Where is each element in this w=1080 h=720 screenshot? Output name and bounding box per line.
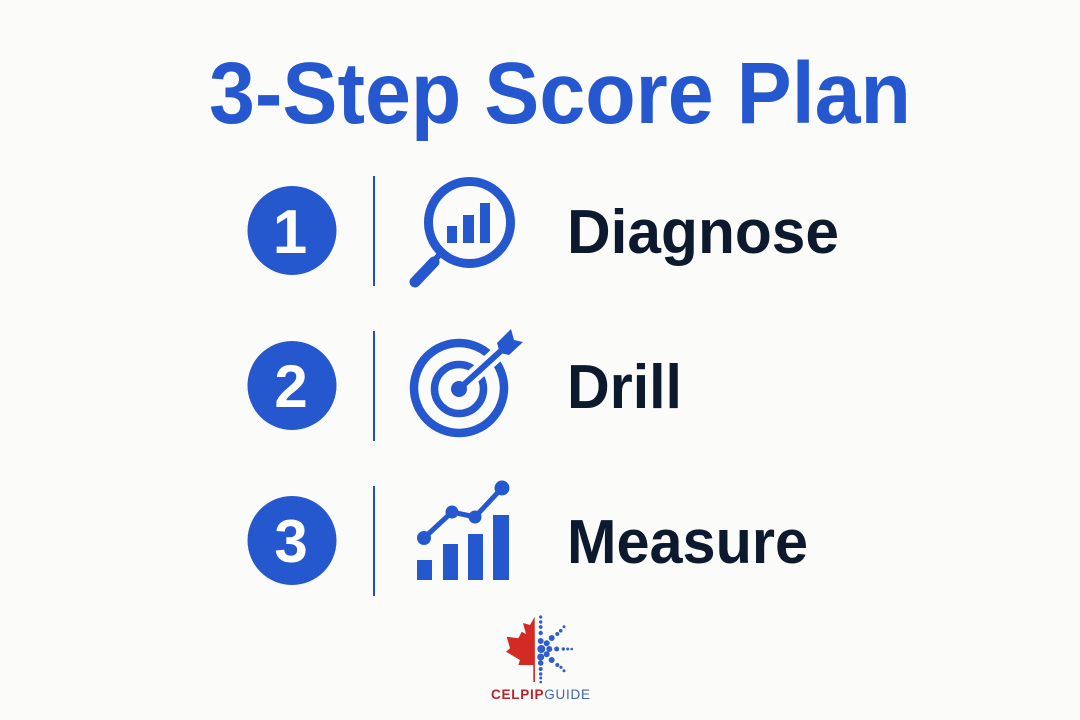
icon: half maple leaf [506, 617, 535, 682]
step 2 number badge [248, 341, 336, 430]
icon: target with arrow [414, 329, 523, 433]
icon: dot burst [537, 615, 573, 683]
step 1 number badge: 1 [273, 198, 307, 267]
step 2 divider [373, 331, 375, 441]
step 1 label: Diagnose [567, 198, 839, 267]
step 1 row [248, 176, 839, 286]
step 3 label: Measure [567, 508, 808, 577]
step 3 row [248, 480, 808, 596]
step 3 number badge: 3 [274, 508, 308, 575]
title: 3-Step Score Plan [209, 45, 911, 142]
icon: magnifier with bar chart [415, 182, 510, 282]
step 3 divider [373, 486, 375, 596]
logo: CELPIP Guide [491, 615, 590, 702]
step 2 number badge: 2 [274, 353, 308, 420]
step 3 number badge [248, 496, 336, 585]
step 2 row [248, 329, 682, 441]
logo wordmark: CELPIPGUIDE [491, 687, 590, 702]
step 1 number badge [248, 186, 336, 275]
icon: rising bars with trend line [417, 480, 510, 580]
step 2 label: Drill [567, 353, 682, 422]
step 1 divider [373, 176, 375, 286]
